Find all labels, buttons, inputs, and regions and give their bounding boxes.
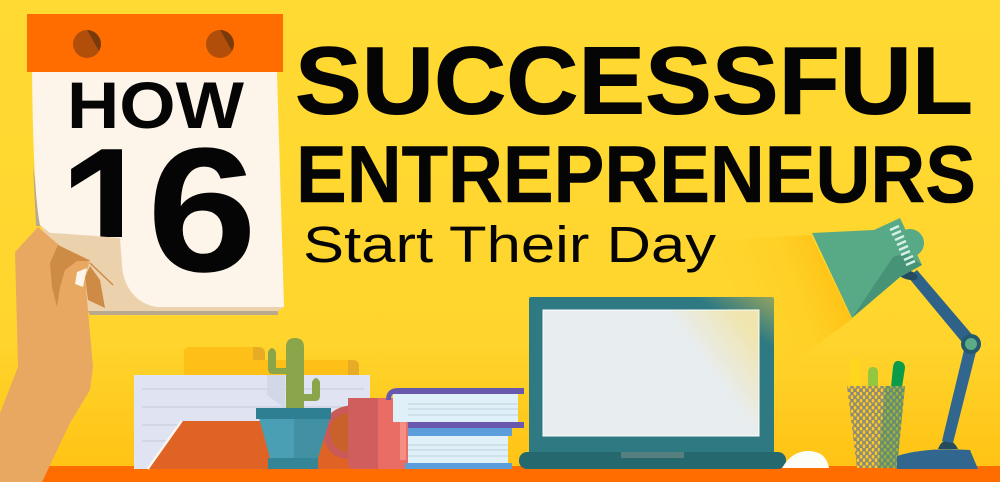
orange book: [148, 421, 355, 469]
mug body: [348, 398, 408, 469]
lamp dome: [896, 229, 924, 257]
lamp shade: [812, 218, 922, 318]
pens: [850, 358, 860, 387]
pot: [259, 418, 330, 458]
calendar page stack: [33, 165, 278, 315]
lamp base: [897, 449, 978, 469]
text: 16: 6: [147, 111, 257, 309]
pen cup: [847, 358, 905, 468]
binding hole right: [206, 30, 234, 58]
laptop base: [519, 452, 786, 469]
folders: [184, 347, 359, 375]
calendar page: [32, 72, 284, 307]
lamp light beam: [716, 235, 852, 380]
mouse: [782, 451, 829, 468]
lamp neck cap: [897, 268, 919, 282]
paper sheet: [134, 375, 370, 469]
lamp arm lower: [942, 350, 976, 443]
title line 1: SUCCESSFUL: [295, 28, 973, 134]
subtitle: Start Their Day: [303, 216, 717, 273]
lamp arm upper: [908, 270, 975, 347]
mesh cup: [847, 386, 905, 468]
bottom book: [408, 428, 512, 436]
cactus plant: [256, 338, 331, 469]
second cover: [408, 422, 524, 428]
top book: [386, 388, 524, 400]
finger shadow lower: [85, 266, 105, 308]
desk: [40, 466, 1000, 482]
binding hole left: [73, 30, 101, 58]
cactus: [286, 338, 304, 409]
laptop lid: [529, 297, 774, 457]
text: 16: 1: [59, 111, 157, 309]
laptop screen: [543, 310, 759, 436]
finger crease: [90, 263, 113, 285]
calendar binding: [27, 14, 283, 72]
books: [386, 388, 524, 469]
hand: [0, 227, 113, 482]
lamp vents: [890, 226, 915, 265]
curled page underside: [40, 225, 284, 311]
lamp joint: [961, 334, 981, 354]
mug: [327, 398, 408, 469]
text: 16: [71, 147, 250, 273]
desk lamp: [812, 218, 981, 469]
mug handle: [327, 409, 350, 456]
finger shadow: [50, 245, 90, 307]
laptop: [519, 297, 786, 469]
fingernail: [75, 268, 87, 287]
title line 2: ENTREPRENEURS: [296, 130, 976, 220]
hand shape: [0, 227, 93, 482]
calendar: [27, 14, 284, 315]
text: HOW: HOW: [67, 68, 245, 142]
